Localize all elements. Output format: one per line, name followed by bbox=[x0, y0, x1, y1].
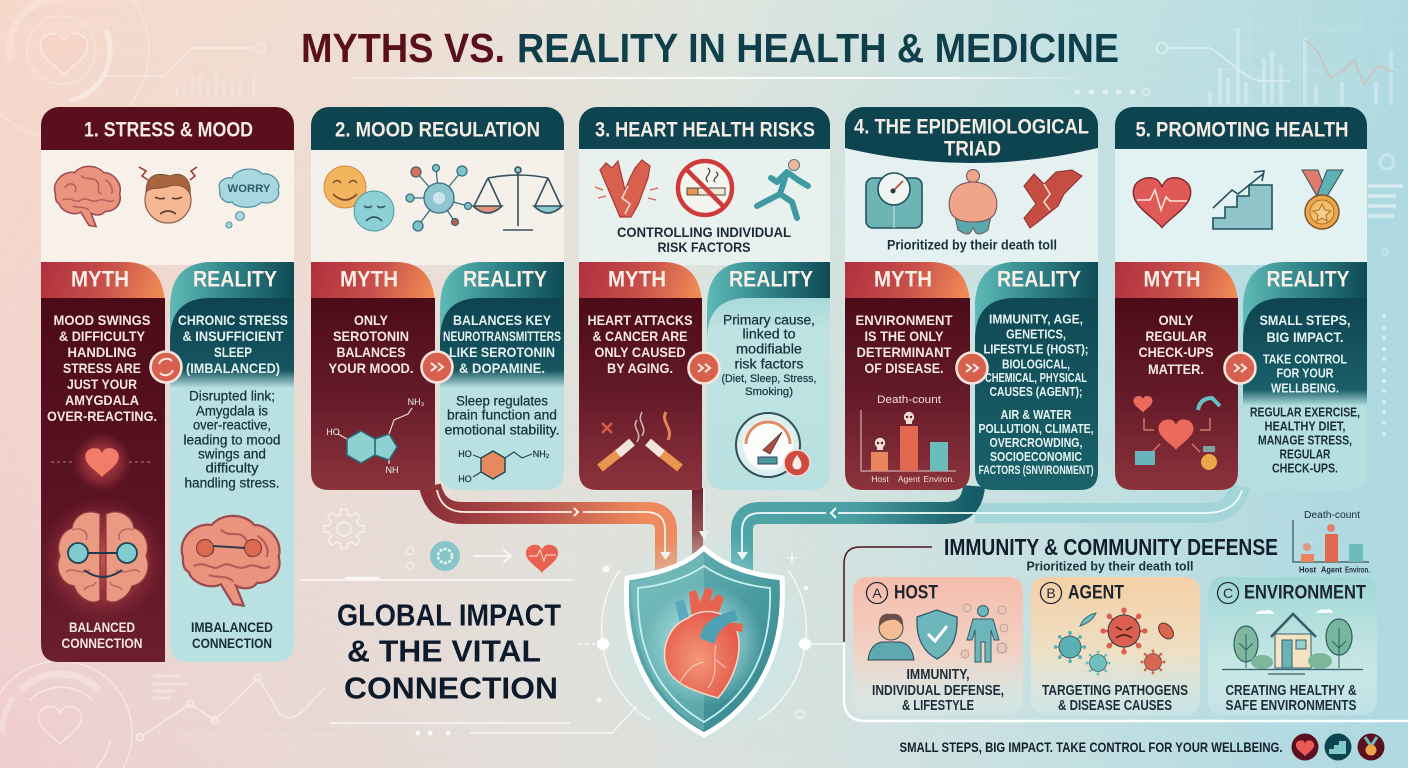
myth column bbox=[845, 262, 970, 490]
reality explanation: linked to bbox=[742, 326, 796, 342]
icon: person bbox=[868, 614, 914, 660]
myth text: YOUR MOOD. bbox=[328, 360, 414, 376]
reality explanation bbox=[722, 312, 816, 398]
reality explanation: handling stress. bbox=[184, 476, 280, 490]
shield with heart bbox=[578, 532, 844, 748]
heading: immunity and community defense: Prioritized by their death toll bbox=[1026, 558, 1194, 574]
icon: neuron network bbox=[406, 164, 472, 231]
myth column: MYTH bbox=[608, 266, 666, 292]
heading: TRIAD bbox=[944, 138, 1001, 160]
myth text: ONLY bbox=[354, 312, 389, 328]
reality column: REALITY bbox=[463, 266, 547, 292]
myth text: HEART ATTACKS bbox=[588, 312, 692, 328]
heading: global impact: GLOBAL IMPACT bbox=[337, 598, 561, 632]
heading: global impact: & THE VITAL bbox=[347, 634, 541, 668]
reality headline: CHRONIC STRESS bbox=[178, 312, 288, 328]
reality text: BIOLOGICAL, bbox=[1002, 356, 1070, 372]
reality explanation bbox=[444, 394, 560, 438]
reality text: SOCIOECONOMIC bbox=[990, 450, 1082, 464]
reality headline bbox=[443, 312, 561, 376]
arrow: orange connector from panel 2 to shield bbox=[430, 486, 671, 572]
arrow: maroon connector from panel 3 to shield bbox=[692, 488, 709, 558]
reality column bbox=[1243, 262, 1367, 490]
reality text: CAUSES (AGENT); bbox=[990, 385, 1082, 399]
myth text: MOOD SWINGS bbox=[54, 312, 150, 328]
reality headline: LIKE SEROTONIN bbox=[449, 344, 555, 360]
label: HOST bbox=[894, 582, 938, 604]
reality column: REALITY bbox=[997, 266, 1081, 292]
reality explanation: leading to mood bbox=[184, 432, 280, 448]
reality column bbox=[975, 262, 1098, 490]
myth column: MYTH bbox=[874, 266, 932, 292]
reality explanation bbox=[184, 388, 280, 490]
icon: dopamine molecule: NH₂ bbox=[533, 449, 550, 459]
heading bbox=[311, 107, 564, 150]
icon: arrow button bbox=[1224, 352, 1256, 384]
reality column bbox=[707, 262, 830, 490]
panel 3: heart health risks bbox=[579, 107, 830, 490]
footer message bbox=[900, 734, 1384, 760]
reality text: POLLUTION, CLIMATE, bbox=[978, 422, 1094, 436]
icon: no smoking bbox=[678, 161, 732, 215]
reality text: CHEMICAL, PHYSICAL bbox=[985, 371, 1087, 385]
icon: house and trees bbox=[1222, 609, 1363, 674]
myth text: & CANCER ARE bbox=[592, 328, 688, 344]
reality explanation: Amygdala is bbox=[196, 404, 268, 418]
caption: risk factors: CONTROLLING INDIVIDUAL bbox=[617, 224, 791, 240]
reality explanation: emotional stability. bbox=[444, 422, 560, 438]
myth text: BALANCES bbox=[336, 344, 406, 360]
bar chart: death count mini: Death-count bbox=[1304, 509, 1360, 521]
caption: INDIVIDUAL DEFENSE, bbox=[872, 683, 1004, 699]
icon: anatomical heart bbox=[665, 587, 743, 698]
myth column bbox=[579, 262, 702, 490]
card c: environment bbox=[1208, 577, 1377, 715]
heading: 2. MOOD REGULATION bbox=[335, 118, 540, 142]
myth text: SEROTONIN bbox=[333, 328, 409, 344]
myth text: OVER-REACTING. bbox=[47, 408, 157, 424]
caption: & LIFESTYLE bbox=[902, 698, 974, 714]
myth column: MYTH bbox=[1144, 266, 1200, 292]
icon: heart pulse bbox=[526, 545, 558, 573]
icon: arrow button bbox=[956, 352, 988, 384]
icon: worry cloud bbox=[219, 169, 279, 228]
icon: cycle button bbox=[150, 352, 182, 382]
myth column: MYTH bbox=[71, 266, 129, 292]
myth text: MATTER. bbox=[1148, 361, 1204, 377]
label: B bbox=[1046, 585, 1056, 601]
heading: immunity and community defense bbox=[944, 534, 1278, 574]
heading bbox=[1115, 107, 1367, 149]
icon: serotonin molecule: NH bbox=[386, 465, 398, 475]
reality explanation: brain function and bbox=[447, 408, 557, 422]
myth text: HANDLING bbox=[68, 344, 137, 360]
bar chart: death count: Death-count bbox=[877, 394, 941, 406]
caption bbox=[1226, 683, 1357, 714]
label bbox=[866, 582, 938, 604]
decoration: bottom-left rings and line chart bbox=[0, 661, 340, 768]
panel 5: promoting health bbox=[1115, 107, 1367, 490]
caption: imbalanced connection: IMBALANCED bbox=[191, 619, 273, 635]
panel 2: mood regulation bbox=[311, 107, 564, 490]
title: MYTHS VS. bbox=[301, 25, 505, 71]
reality headline: WELLBEING. bbox=[1271, 380, 1339, 396]
bar chart: death count mini: Environ. bbox=[1345, 566, 1370, 574]
bar chart: death count mini bbox=[1293, 509, 1370, 574]
reality headline: (IMBALANCED) bbox=[186, 360, 280, 376]
myth text: REGULAR bbox=[1146, 328, 1206, 344]
icon: standing figure bbox=[959, 602, 1010, 662]
small sparkles around shield bbox=[596, 553, 808, 718]
reality list: REGULAR bbox=[1280, 446, 1331, 462]
caption: TARGETING PATHOGENS bbox=[1042, 683, 1188, 699]
reality explanation: (Diet, Sleep, Stress, bbox=[722, 373, 816, 385]
label bbox=[1040, 582, 1124, 604]
reality text: LIFESTYLE (HOST); bbox=[984, 342, 1088, 356]
icon: balance scale bbox=[473, 167, 562, 230]
icon: teal gear badge bbox=[430, 541, 460, 571]
caption: & DISEASE CAUSES bbox=[1058, 698, 1172, 714]
label: A bbox=[872, 585, 882, 601]
myth column: MYTH bbox=[340, 266, 398, 292]
caption: IMMUNITY, bbox=[906, 667, 970, 683]
reality explanation: Disrupted link; bbox=[189, 388, 275, 404]
heading: 5. PROMOTING HEALTH bbox=[1136, 118, 1348, 142]
reality column: REALITY bbox=[1266, 266, 1350, 292]
panel 1: stress and mood bbox=[39, 107, 294, 662]
arrow: teal connector from panels 4 and 5 to shield bbox=[737, 486, 1242, 572]
reality headline bbox=[178, 312, 288, 376]
myth text: CHECK-UPS bbox=[1138, 344, 1214, 360]
bar chart: death count: Agent bbox=[898, 474, 921, 484]
reality column: REALITY bbox=[193, 266, 277, 292]
reality headline: & INSUFFICIENT bbox=[182, 328, 284, 344]
caption: death toll: Prioritized by their death toll bbox=[887, 238, 1057, 252]
heading: immunity and community defense: IMMUNITY & COMMUNITY DEFENSE bbox=[944, 534, 1278, 560]
heading: global impact: CONNECTION bbox=[344, 670, 558, 706]
icon: stressed face bbox=[139, 167, 197, 223]
icon: footer medal bbox=[1358, 734, 1384, 760]
reality text: OVERCROWDING, bbox=[990, 436, 1082, 450]
reality headline: & DOPAMINE. bbox=[459, 360, 545, 376]
caption: balanced connection: BALANCED bbox=[69, 619, 135, 635]
icon: heart with pulse bbox=[1133, 178, 1191, 228]
reality list bbox=[1250, 404, 1360, 476]
reality list: MANAGE STRESS, bbox=[1258, 432, 1352, 448]
reality headline: BALANCES KEY bbox=[453, 312, 552, 328]
icon: gauge bbox=[736, 413, 810, 477]
immunity frame bbox=[844, 547, 1408, 721]
bar chart: death count: Environ. bbox=[923, 474, 955, 484]
bar chart: death count mini: Agent bbox=[1321, 566, 1342, 574]
reality explanation: Sleep regulates bbox=[456, 394, 548, 408]
icon: footer stairs bbox=[1324, 734, 1352, 760]
icon: overweight person bbox=[949, 170, 997, 234]
icon: balanced brain bbox=[39, 496, 167, 624]
footer message: SMALL STEPS, BIG IMPACT. TAKE CONTROL FOR YOUR WELLBEING. bbox=[900, 739, 1282, 755]
icon: shield check bbox=[917, 610, 957, 659]
caption: CREATING HEALTHY & bbox=[1226, 683, 1357, 699]
icon: arrow button bbox=[422, 352, 452, 382]
title: REALITY IN HEALTH & MEDICINE bbox=[517, 25, 1119, 71]
decoration: title underline bbox=[320, 77, 1090, 79]
icon: stairs with arrow bbox=[1213, 171, 1272, 229]
myth text: AMYGDALA bbox=[65, 392, 139, 408]
reality headline bbox=[1260, 312, 1350, 396]
heading bbox=[579, 107, 830, 149]
myth text: STRESS ARE bbox=[63, 360, 141, 376]
panel 4: the epidemiological triad bbox=[845, 107, 1098, 490]
icon: serotonin molecule: NH₃ bbox=[408, 397, 425, 407]
myth text: BY AGING. bbox=[607, 360, 673, 376]
bar chart: death count: Host bbox=[871, 474, 889, 484]
icon: dopamine molecule: HO bbox=[458, 449, 472, 459]
reality list: REGULAR EXERCISE, bbox=[1250, 404, 1360, 420]
reality explanation: Smoking) bbox=[745, 386, 793, 398]
icon: pathogens bbox=[1054, 607, 1176, 675]
myth text: IS THE ONLY bbox=[864, 328, 944, 344]
reality explanation: swings and bbox=[198, 446, 266, 462]
reality text: IMMUNITY, AGE, bbox=[989, 312, 1083, 326]
bar chart: death count mini: Host bbox=[1299, 566, 1316, 574]
label: C bbox=[1223, 585, 1233, 601]
reality headline: SLEEP bbox=[214, 344, 252, 360]
decoration: top-left heart rings bbox=[0, 0, 265, 138]
caption: imbalanced connection: CONNECTION bbox=[192, 635, 272, 651]
icon: weighing scale bbox=[866, 173, 922, 228]
icon: mood faces bbox=[324, 166, 394, 231]
reality text: GENETICS, bbox=[1006, 326, 1066, 342]
reality explanation: Primary cause, bbox=[723, 312, 815, 328]
reality headline: TAKE CONTROL bbox=[1263, 352, 1347, 366]
caption: balanced connection bbox=[62, 619, 142, 651]
reality column bbox=[440, 262, 564, 490]
myth column bbox=[311, 262, 435, 490]
decorative rules near global impact bbox=[300, 580, 637, 733]
myth text: & DIFFICULTY bbox=[59, 328, 146, 344]
card b: agent bbox=[1031, 577, 1200, 715]
myth text: ONLY CAUSED bbox=[594, 344, 686, 360]
reality list: HEALTHY DIET, bbox=[1264, 418, 1346, 434]
myth text: ONLY bbox=[1158, 312, 1194, 328]
decorative process row bbox=[324, 509, 558, 578]
icon: runner bbox=[757, 160, 808, 218]
icon: broken cigarette bbox=[600, 412, 680, 468]
reality headline: FOR YOUR bbox=[1276, 366, 1334, 380]
card a: host bbox=[853, 577, 1023, 715]
heading: global impact bbox=[337, 598, 561, 706]
myth text bbox=[856, 312, 953, 376]
heading: 1. STRESS & MOOD bbox=[84, 118, 253, 142]
heading: 3. HEART HEALTH RISKS bbox=[595, 118, 815, 142]
caption: risk factors: RISK FACTORS bbox=[658, 239, 750, 255]
reality headline: NEUROTRANSMITTERS bbox=[443, 328, 561, 344]
icon: brain bbox=[55, 166, 120, 227]
caption: imbalanced connection bbox=[191, 619, 273, 651]
title bbox=[301, 25, 1119, 71]
myth text: JUST YOUR bbox=[67, 376, 137, 392]
myth column bbox=[1115, 262, 1238, 490]
caption bbox=[872, 667, 1004, 714]
caption: risk factors bbox=[617, 224, 791, 255]
reality explanation: risk factors bbox=[734, 356, 804, 372]
reality explanation: over-reactive, bbox=[193, 418, 271, 432]
icon: medal bbox=[1302, 170, 1343, 229]
icon: arrow button bbox=[688, 352, 720, 384]
reality explanation: modifiable bbox=[736, 342, 802, 356]
heading bbox=[41, 107, 294, 150]
label: ENVIRONMENT bbox=[1244, 582, 1366, 604]
reality explanation: difficulty bbox=[206, 460, 259, 476]
reality column: REALITY bbox=[729, 266, 813, 292]
icon: glowing heart bbox=[51, 432, 153, 492]
reality column bbox=[170, 262, 294, 662]
icon: damaged artery bbox=[1024, 170, 1082, 228]
reality list: CHECK-UPS. bbox=[1272, 460, 1338, 476]
myth text: ENVIRONMENT bbox=[856, 312, 953, 328]
myth text bbox=[47, 312, 157, 424]
myth text: OF DISEASE. bbox=[864, 360, 944, 376]
reality headline: SMALL STEPS, bbox=[1260, 312, 1350, 328]
icon: footer heart bbox=[1292, 734, 1318, 760]
caption: SAFE ENVIRONMENTS bbox=[1226, 698, 1357, 714]
decoration: top-right chart bbox=[1077, 15, 1408, 105]
reality text: AIR & WATER bbox=[1000, 408, 1072, 422]
myth text bbox=[588, 312, 692, 376]
icon: damaged artery bbox=[595, 160, 658, 217]
icon: gear outline bbox=[324, 509, 364, 549]
bar chart: death count bbox=[861, 394, 956, 484]
icon: dopamine molecule bbox=[458, 449, 550, 484]
icon: check-up cluster bbox=[1133, 396, 1220, 470]
reality text bbox=[978, 312, 1094, 477]
reality headline: BIG IMPACT. bbox=[1266, 329, 1344, 345]
decoration: right column marks bbox=[1368, 155, 1403, 434]
icon: serotonin molecule: HO bbox=[326, 427, 340, 437]
label: AGENT bbox=[1068, 582, 1124, 604]
icon: dopamine molecule: HO bbox=[458, 474, 472, 484]
icon: serotonin molecule bbox=[326, 397, 425, 475]
heading bbox=[845, 107, 1098, 163]
myth text bbox=[328, 312, 414, 376]
myth column bbox=[39, 262, 167, 662]
myth text bbox=[1138, 312, 1214, 377]
reality text: FACTORS (SNVIRONMENT) bbox=[978, 465, 1094, 477]
icon: imbalanced brain bbox=[182, 516, 280, 606]
myth text: DETERMINANT bbox=[856, 344, 952, 360]
caption bbox=[1042, 683, 1188, 714]
caption: balanced connection: CONNECTION bbox=[62, 635, 142, 651]
arrow: to heart bbox=[473, 549, 511, 563]
icon: worry cloud: WORRY bbox=[228, 183, 271, 195]
heading: 4. THE EPIDEMIOLOGICAL bbox=[854, 116, 1089, 138]
